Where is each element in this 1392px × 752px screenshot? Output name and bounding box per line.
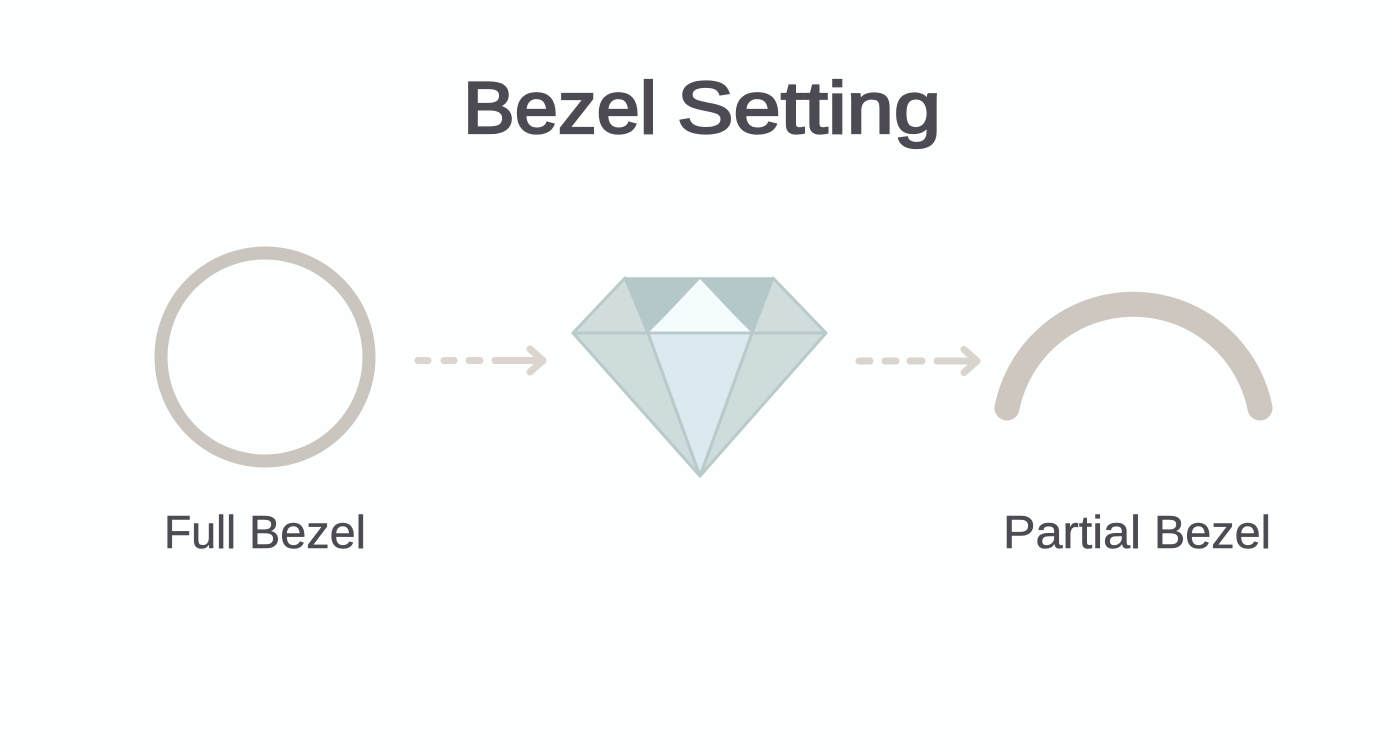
label: partial bezel: Bezel bbox=[1154, 506, 1271, 558]
icon: full bezel ring bbox=[161, 253, 369, 461]
label: partial bezel: Partial bbox=[1003, 506, 1141, 558]
icon: partial bezel arc bbox=[1007, 304, 1260, 408]
arrow: diamond to partial bezel bbox=[859, 350, 977, 372]
label: full bezel: Bezel bbox=[249, 506, 366, 558]
label: partial bezel bbox=[1003, 506, 1271, 558]
arrow: full bezel to diamond bbox=[418, 349, 543, 372]
label: full bezel: Full bbox=[164, 506, 236, 558]
icon: diamond bbox=[573, 278, 826, 476]
title bbox=[463, 68, 941, 149]
title: Bezel bbox=[463, 68, 657, 149]
title: Setting bbox=[677, 68, 941, 149]
label: full bezel bbox=[164, 506, 366, 558]
